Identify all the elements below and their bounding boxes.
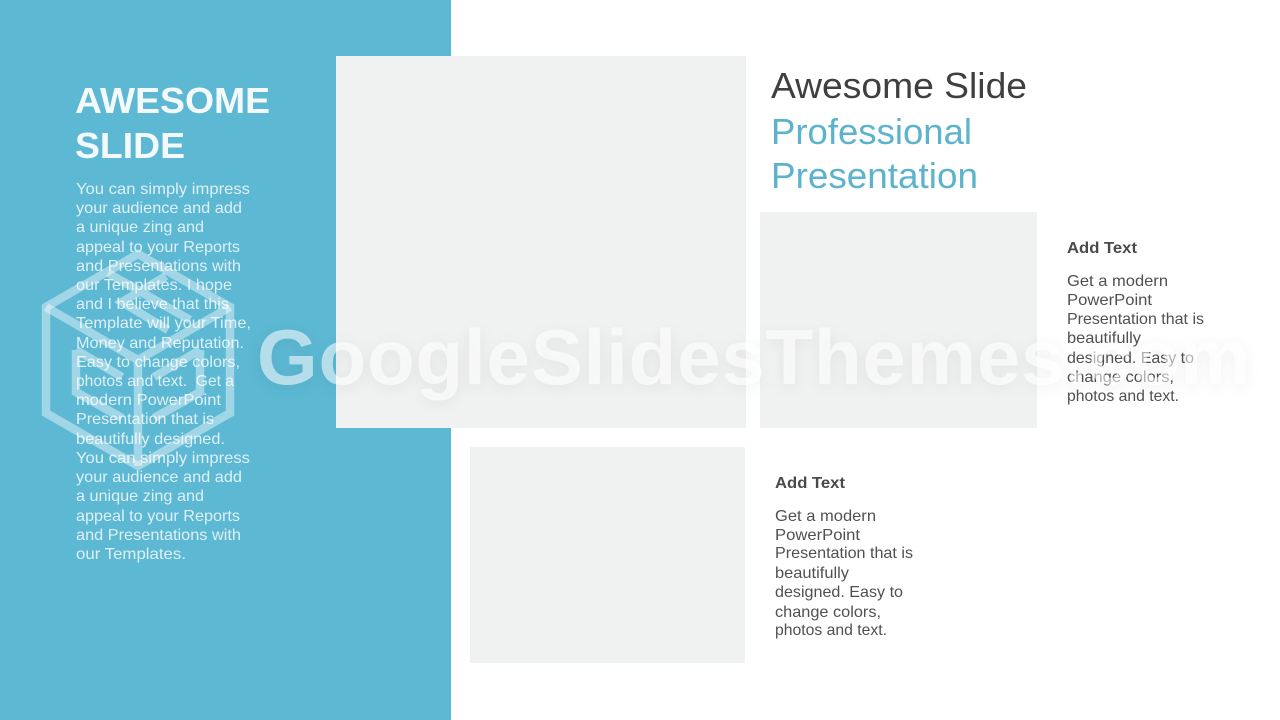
image placeholder: bottom bbox=[470, 447, 745, 663]
text block: bottom: Presentation that is bbox=[775, 545, 913, 562]
subtitle: Presentation bbox=[771, 155, 978, 196]
sidebar body text: a unique zing and bbox=[76, 219, 204, 236]
text block: bottom: designed. Easy to bbox=[775, 584, 903, 601]
panel: blue sidebar bbox=[0, 0, 451, 720]
text block: right: designed. Easy to bbox=[1067, 350, 1194, 367]
sidebar body text: You can simply impress bbox=[76, 181, 250, 198]
image placeholder: large bbox=[336, 56, 746, 428]
sidebar body text: your audience and add bbox=[76, 200, 242, 217]
sidebar body text: and Presentations with bbox=[76, 527, 241, 544]
text block: right: PowerPoint bbox=[1067, 292, 1153, 309]
sidebar body text: Easy to change colors, bbox=[76, 354, 240, 371]
sidebar body text: Presentation that is bbox=[76, 411, 214, 428]
sidebar body text: our Templates. bbox=[76, 546, 186, 563]
sidebar body text: modern PowerPoint bbox=[76, 392, 222, 409]
text block: bottom: Get a modern bbox=[775, 508, 876, 525]
sidebar body text: our Templates. I hope bbox=[76, 277, 232, 294]
sidebar body text: appeal to your Reports bbox=[76, 508, 240, 525]
sidebar body text: photos and text. Get a bbox=[76, 373, 234, 390]
sidebar body text: beautifully designed. bbox=[76, 431, 225, 448]
main title: Awesome Slide bbox=[771, 65, 1027, 106]
sidebar body text: Money and Reputation. bbox=[76, 335, 244, 352]
text block: right: Add Text bbox=[1067, 240, 1138, 257]
icon: watermark hexagon cube bbox=[46, 254, 230, 466]
subtitle: Professional bbox=[771, 111, 972, 152]
text block: right bbox=[1067, 240, 1204, 405]
sidebar body text: your audience and add bbox=[76, 469, 242, 486]
sidebar body text: a unique zing and bbox=[76, 488, 204, 505]
sidebar body text: and I believe that this bbox=[76, 296, 229, 313]
text block: bottom: change colors, bbox=[775, 604, 881, 621]
text block: right: Presentation that is bbox=[1067, 311, 1204, 328]
sidebar heading: AWESOME bbox=[75, 80, 270, 121]
subtitle bbox=[771, 111, 978, 196]
sidebar body text: and Presentations with bbox=[76, 258, 241, 275]
image placeholder: right bbox=[760, 212, 1037, 428]
text block: right: photos and text. bbox=[1067, 388, 1179, 405]
watermark text: GoogleSlidesThemes.com bbox=[257, 313, 1250, 401]
sidebar body text: You can simply impress bbox=[76, 450, 250, 467]
text block: bottom bbox=[775, 475, 913, 639]
sidebar body text: appeal to your Reports bbox=[76, 239, 240, 256]
sidebar heading bbox=[75, 80, 270, 166]
sidebar body text: Template will your Time, bbox=[76, 315, 251, 332]
text block: right: Get a modern bbox=[1067, 273, 1168, 290]
sidebar heading: SLIDE bbox=[75, 125, 185, 166]
text block: bottom: PowerPoint bbox=[775, 527, 861, 544]
text block: bottom: Add Text bbox=[775, 475, 846, 492]
text block: right: beautifully bbox=[1067, 330, 1141, 347]
sidebar body text bbox=[76, 181, 251, 563]
text block: bottom: beautifully bbox=[775, 565, 849, 582]
text block: right: change colors, bbox=[1067, 369, 1174, 386]
text block: bottom: photos and text. bbox=[775, 622, 887, 639]
